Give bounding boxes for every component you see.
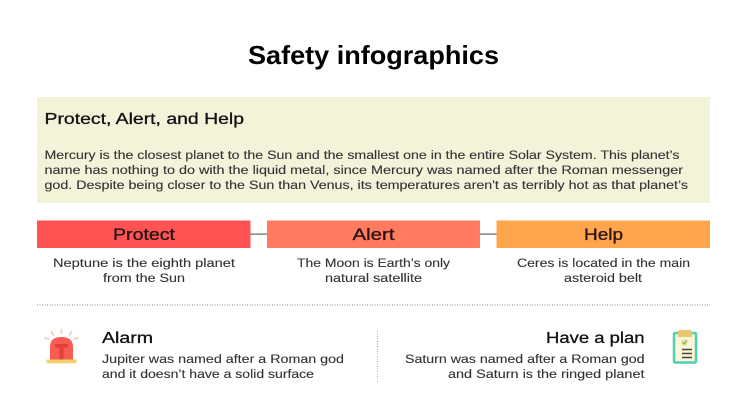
icon: alarm siren — [45, 330, 78, 363]
Alert description — [297, 256, 451, 285]
column: Help — [496, 220, 710, 285]
Protect label: Protect — [113, 226, 175, 244]
column: Alert — [267, 220, 480, 285]
column: Protect — [37, 220, 250, 285]
panel body text: god. Despite being closer to the Sun than Venus, its temperatures aren't as terribly hot as that planet’s — [44, 178, 688, 192]
Protect description — [53, 256, 236, 285]
panel heading: Protect, Alert, and Help — [44, 111, 244, 128]
icon: clipboard checklist — [674, 330, 696, 362]
panel body text: Mercury is the closest planet to the Sun and the smallest one in the entire Solar System. This planet’s — [44, 148, 680, 162]
Protect description: from the Sun — [103, 271, 185, 285]
Alarm heading: Alarm — [102, 330, 153, 347]
Have a plan description — [405, 352, 645, 381]
Have a plan description: and Saturn is the ringed planet — [448, 367, 645, 381]
Help description — [517, 256, 690, 285]
Have a plan heading: Have a plan — [546, 330, 644, 347]
Alert label: Alert — [352, 226, 395, 244]
Alarm description — [102, 352, 344, 381]
Protect description: Neptune is the eighth planet — [53, 256, 236, 270]
Alarm description: and it doesn’t have a solid surface — [102, 367, 314, 381]
block: Alarm — [102, 330, 344, 381]
Alert description: The Moon is Earth’s only — [297, 256, 451, 270]
panel body text — [44, 148, 688, 192]
connector: Protect to Alert — [250, 234, 268, 235]
Alarm description: Jupiter was named after a Roman god — [102, 352, 344, 366]
panel: Protect, Alert, and Help summary — [37, 97, 710, 203]
Help description: Ceres is located in the main — [517, 256, 690, 270]
panel body text: name has nothing to do with the liquid metal, since Mercury was named after the Roman messenger — [44, 163, 683, 177]
Help description: asteroid belt — [564, 271, 643, 285]
connector: Alert to Help — [480, 234, 498, 235]
Have a plan description: Saturn was named after a Roman god — [405, 352, 644, 366]
Help label: Help — [584, 226, 623, 244]
block: Have a plan — [405, 330, 645, 381]
title: Safety infographics — [248, 40, 499, 70]
Alert description: natural satellite — [325, 271, 422, 285]
